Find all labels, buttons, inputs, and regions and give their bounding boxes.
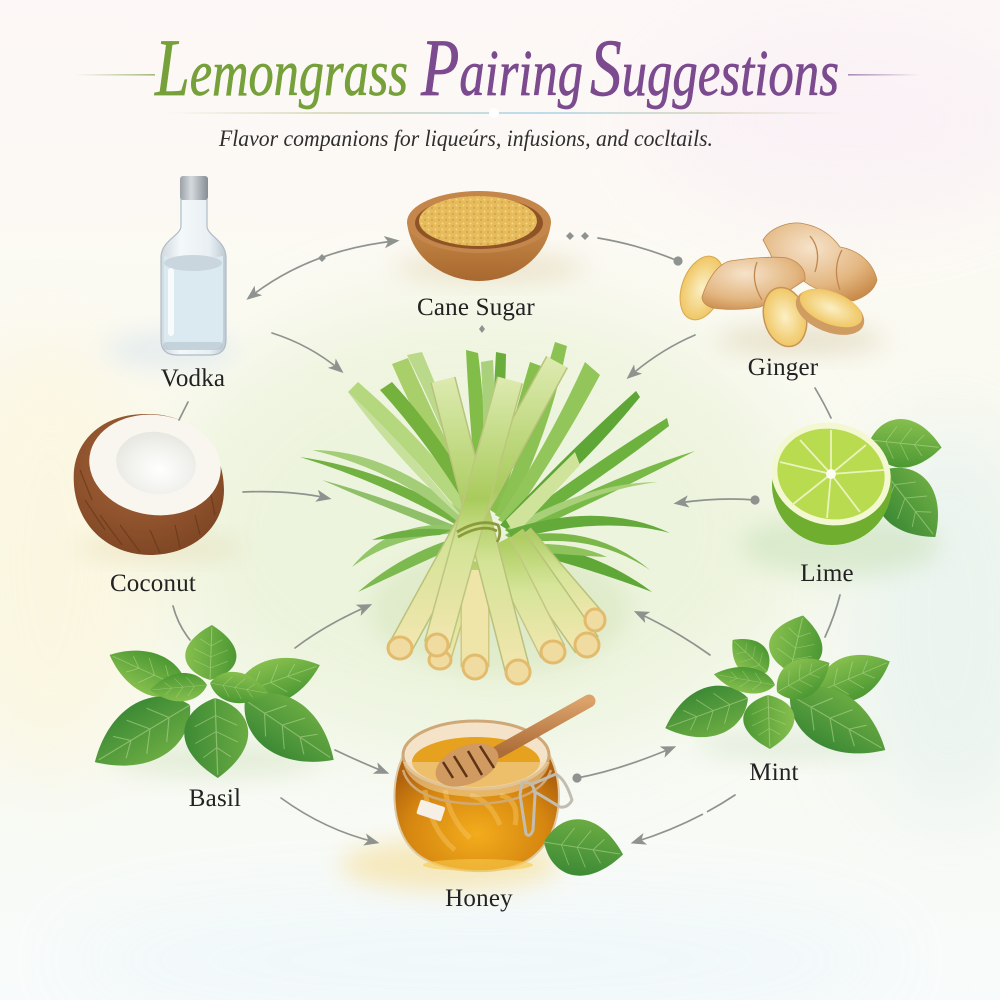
icon: bowl of cane sugar [395,191,585,282]
icon: lime with leaves [762,412,958,554]
connector: ginger to lime [815,388,831,418]
arrow: vodka to lemongrass [272,333,340,370]
arrow: cane sugar to ginger [598,238,678,261]
icon: vodka bottle [161,176,226,355]
arrow: honey to mint [577,748,672,778]
icon: coconut [74,406,245,560]
arrow: basil to lemongrass [295,606,368,648]
arrow: basil to honey [335,750,385,772]
label: Coconut: Coconut [110,570,196,597]
lemongrass leaves [300,342,695,592]
arrow: lime to lemongrass [678,499,755,503]
label: Ginger: Ginger [748,354,819,381]
arrow: vodka to cane sugar [250,241,395,297]
stalk ends [388,609,605,684]
label: Mint: Mint [749,759,799,786]
connector: vodka to coconut [179,402,188,420]
jar clasp [520,774,572,835]
arrow: mint to lemongrass [638,613,710,655]
subtitle: Flavor companions for liqueúrs, infusions, and cocltails. [218,126,713,151]
arrow: mint to honey [635,795,735,842]
arrow: coconut to lemongrass [243,492,327,498]
title: Lemongrass [154,22,408,113]
twine [457,523,500,542]
honey dipper [429,701,589,795]
icon: basil [80,624,349,787]
arrow: basil label to honey [281,798,375,842]
connector: coconut to basil [173,606,190,640]
label: Basil: Basil [189,785,241,812]
arrow: ginger to lemongrass [630,335,695,376]
connector: lime to mint [825,595,840,637]
icon: ginger [672,223,885,355]
label: Vodka: Vodka [161,365,225,392]
title rules [75,74,920,118]
label: Lime: Lime [800,560,854,587]
icon: honey jar [394,701,589,871]
label: Honey: Honey [445,885,513,912]
title: Suggestions [590,22,839,113]
icon: honey mint leaf [540,814,627,882]
label: Cane Sugar: Cane Sugar [417,294,535,321]
title: Pairing [420,22,583,113]
small diamonds [318,232,589,333]
title [154,22,839,113]
connecting arrows [173,238,840,842]
icon: mint [657,609,899,774]
lemongrass stalks [400,362,595,672]
icon: lemongrass bundle [300,342,695,684]
